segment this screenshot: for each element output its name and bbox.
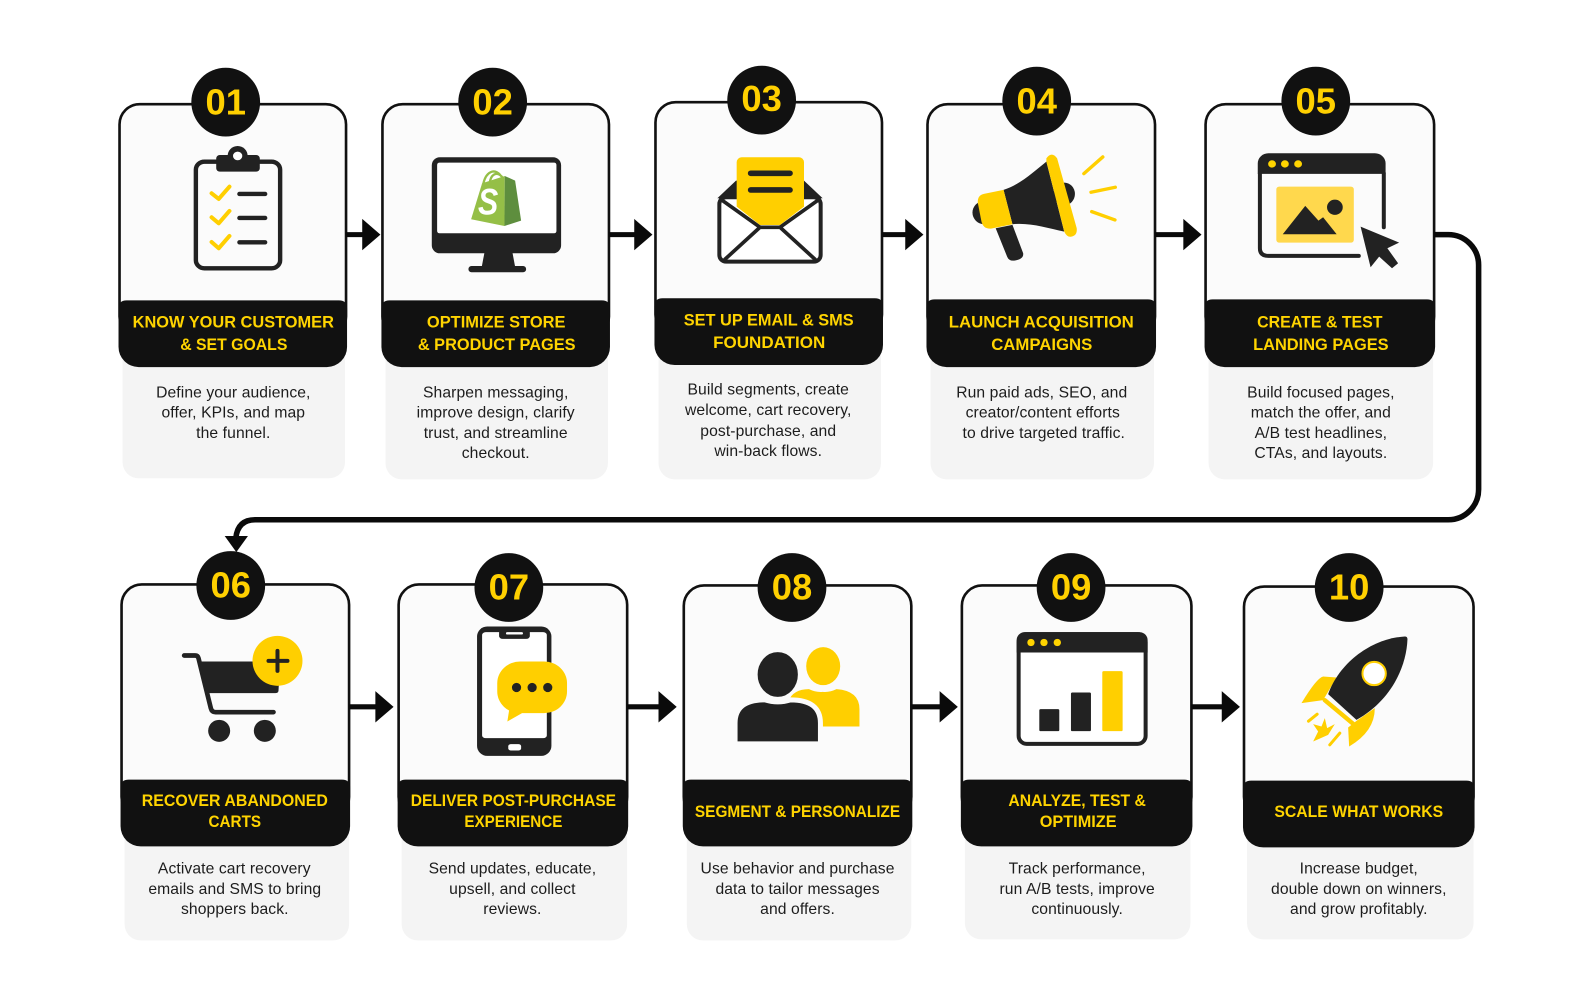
description: match the offer, and [1251, 405, 1391, 422]
description: post-purchase, and [700, 423, 836, 440]
description: upsell, and collect [449, 881, 576, 898]
description: double down on winners, [1271, 881, 1447, 898]
heading: & PRODUCT PAGES [418, 336, 576, 354]
heading: OPTIMIZE STORE [427, 314, 566, 332]
icon: phone with chat bubble [477, 627, 567, 756]
icon: monitor with shopping bag: S [478, 180, 498, 222]
panel: step 02 [381, 68, 610, 479]
arrow 02 to 03 [609, 219, 652, 250]
description: Activate cart recovery [158, 861, 311, 878]
icon: two people [735, 647, 859, 744]
heading: OPTIMIZE [1040, 813, 1117, 831]
arrow 08 to 09 [911, 691, 958, 723]
description: Build focused pages, [1247, 384, 1395, 401]
description: reviews. [483, 901, 542, 918]
icon: rocket [1301, 636, 1407, 746]
description: to drive targeted traffic. [963, 425, 1125, 442]
description: Send updates, educate, [429, 861, 596, 878]
number 03: 03 [741, 78, 782, 119]
number 06: 06 [211, 565, 251, 606]
heading: SCALE WHAT WORKS [1274, 803, 1443, 821]
icon: envelope with letter [717, 157, 823, 262]
description: A/B test headlines, [1255, 425, 1387, 442]
number 10: 10 [1329, 567, 1369, 608]
heading [1008, 792, 1146, 831]
panel: step 07 [398, 553, 628, 940]
heading [142, 792, 328, 831]
heading: EXPERIENCE [464, 813, 563, 831]
heading: ANALYZE, TEST & [1008, 792, 1146, 810]
arrow 01 to 02 [346, 219, 380, 250]
description: continuously. [1031, 901, 1123, 918]
number 04: 04 [1016, 80, 1058, 121]
number 09: 09 [1051, 567, 1091, 608]
description: welcome, cart recovery, [684, 402, 851, 419]
description: emails and SMS to bring [148, 881, 321, 898]
description: Define your audience, [156, 384, 311, 401]
icon: browser with bar chart [1017, 632, 1148, 744]
panel: step 04 [926, 67, 1156, 479]
panel: step 09 [961, 553, 1192, 939]
description: data to tailor messages [715, 881, 880, 898]
panel: step 06 [121, 551, 350, 940]
description: the funnel. [196, 425, 270, 442]
heading: SEGMENT & PERSONALIZE [695, 803, 900, 821]
heading [684, 312, 854, 352]
heading: CREATE & TEST [1257, 314, 1383, 332]
description: shoppers back. [181, 901, 289, 918]
panel: step 03 [654, 66, 883, 479]
description: Track performance, [1009, 861, 1146, 878]
description: checkout. [462, 445, 530, 462]
arrow 03 to 04 [882, 219, 923, 250]
heading [133, 314, 334, 354]
description: Sharpen messaging, [423, 384, 568, 401]
heading: SET UP EMAIL & SMS [684, 312, 854, 330]
heading: FOUNDATION [713, 334, 825, 352]
icon: megaphone [972, 155, 1115, 261]
number 02: 02 [472, 81, 513, 122]
description: creator/content efforts [966, 405, 1120, 422]
panel: step 10 [1243, 553, 1475, 939]
description: run A/B tests, improve [999, 881, 1155, 898]
heading: LANDING PAGES [1253, 336, 1389, 354]
number 07: 07 [489, 567, 529, 608]
description: CTAs, and layouts. [1254, 445, 1387, 462]
icon: clipboard checklist [196, 146, 280, 268]
icon: shopping cart with plus [184, 636, 302, 742]
arrow 09 to 10 [1191, 691, 1240, 723]
description: Increase budget, [1300, 861, 1418, 878]
description: and offers. [760, 901, 835, 918]
description: win-back flows. [713, 443, 822, 460]
heading: LAUNCH ACQUISITION [949, 314, 1134, 332]
panel: step 01 [119, 68, 347, 478]
icon: browser with image and cursor [1258, 153, 1399, 268]
icon: monitor with shopping bag [432, 157, 561, 272]
description: trust, and streamline [424, 425, 568, 442]
heading: RECOVER ABANDONED [142, 792, 328, 810]
number 08: 08 [772, 567, 812, 608]
number 05: 05 [1296, 80, 1336, 121]
arrow 04 to 05 [1155, 219, 1202, 250]
description: Use behavior and purchase [701, 861, 895, 878]
heading [949, 314, 1134, 354]
panel: step 08 [683, 553, 912, 940]
description: improve design, clarify [417, 405, 575, 422]
heading: & SET GOALS [180, 336, 287, 354]
description: Build segments, create [687, 381, 849, 398]
heading [411, 792, 616, 831]
heading [1253, 314, 1389, 354]
heading: CAMPAIGNS [991, 336, 1092, 354]
heading: KNOW YOUR CUSTOMER [133, 314, 334, 332]
panel: step 05 [1205, 67, 1435, 479]
description: Run paid ads, SEO, and [956, 384, 1127, 401]
arrow 06 to 07 [349, 691, 394, 723]
arrow: connector from row 1 to row 2 [225, 235, 1479, 552]
description: and grow profitably. [1290, 901, 1428, 918]
description: offer, KPIs, and map [161, 405, 305, 422]
heading: DELIVER POST-PURCHASE [411, 792, 616, 810]
arrow 07 to 08 [627, 691, 677, 723]
number 01: 01 [205, 81, 246, 122]
heading: CARTS [209, 813, 261, 831]
heading [418, 314, 576, 354]
